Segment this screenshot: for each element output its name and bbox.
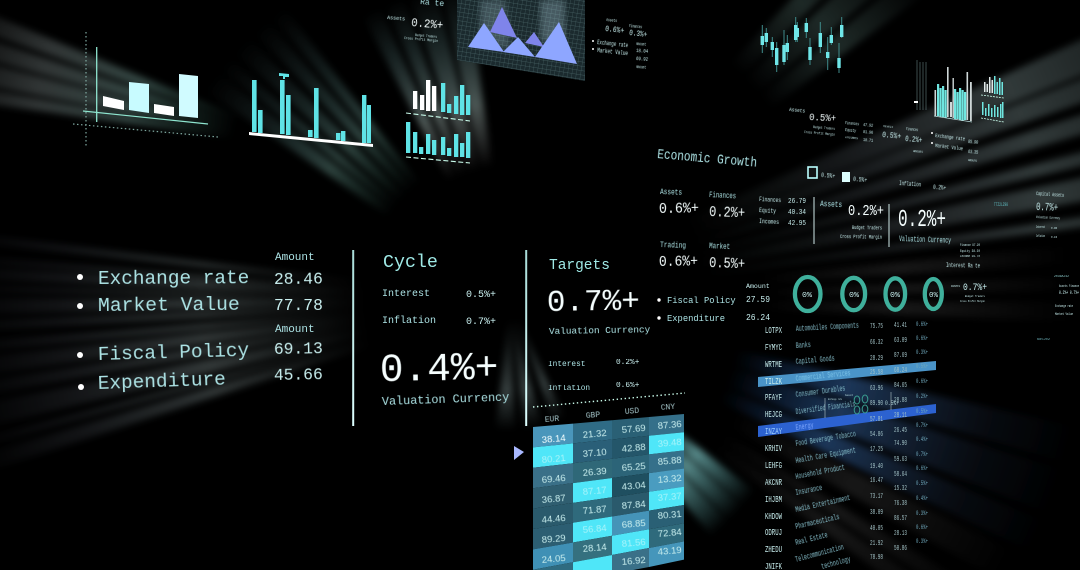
small stats: top centre left: 0.2%+: [411, 17, 444, 33]
currency table: 89.29: [541, 533, 566, 546]
currency table: CNY: [660, 403, 676, 413]
finances table: 26.79: [788, 198, 806, 206]
small stats: top centre right: 0.6%+: [605, 24, 625, 36]
currency table: [533, 403, 684, 570]
chart: candlesticks: [761, 17, 843, 73]
small stats: top centre right: 69.92: [636, 55, 648, 63]
sector names: Real Estate: [794, 530, 829, 548]
sector values: 0.6%+: [916, 465, 928, 472]
sector values: 63.09: [894, 337, 907, 345]
small stats: top centre right: Exchange rate: [597, 39, 629, 49]
small stats: top centre right: Market Value: [597, 47, 629, 57]
donut gauges: 0%: [849, 292, 860, 300]
small stats: top right: [789, 107, 978, 164]
small stats: inflation and side labels: Income 16.70: [960, 255, 980, 259]
sector names: Insurance: [795, 483, 823, 498]
currency table: USD: [624, 407, 640, 417]
small stats: inflation and side labels: 0.1%: [1051, 236, 1058, 240]
left panel: exchange and policy figures: Exchange rate: [98, 267, 249, 290]
left panel: exchange and policy figures: 77.78: [274, 296, 323, 315]
square legend: 0.5%+: [821, 172, 836, 180]
currency table: 68.85: [621, 518, 646, 531]
sector values: 19.40: [870, 463, 883, 471]
small stats: inflation and side labels: Finance 97.20: [960, 243, 980, 248]
tickers: WRTME: [765, 360, 782, 370]
sector values: 0.4%+: [916, 495, 928, 502]
small stats: top centre left: Cross Profit Margin: [404, 36, 439, 44]
sector values: 0.6%+: [916, 321, 928, 328]
marker arrow: [514, 446, 524, 460]
currency table: 43.19: [657, 545, 682, 558]
small stats: top right: Exchange rate: [935, 132, 965, 143]
stats grid: assets, finances, trading, market: Finances: [709, 191, 736, 201]
small stats: top right: Finances: [845, 121, 860, 127]
centre panel: targets: Interest: [548, 361, 585, 369]
sector values: 0.2%+: [916, 393, 928, 400]
stat: assets 0.2%: 0.2%+: [848, 203, 884, 220]
small stats: top right: Finances: [906, 127, 919, 133]
sector values: 0.7%+: [916, 422, 928, 429]
chart: dense bars top right: [914, 60, 1004, 122]
stat: valuation currency 0.2%: [898, 207, 951, 246]
currency table: 56.84: [582, 523, 608, 536]
overlapping mini dashboard: 0.5%+: [885, 400, 899, 407]
small stats: top right: 0.5%+: [882, 131, 902, 142]
chart: paired small bars: [406, 80, 470, 163]
small stat beside gauges: 0.7%+: [963, 283, 987, 294]
highlighted row: commercial services: [758, 361, 936, 387]
small stats: top centre left: Assets: [387, 14, 405, 23]
small stats: top right: Incomes: [845, 136, 858, 141]
centre panel: targets: Inflation: [548, 385, 590, 393]
centre panel: targets: [547, 258, 770, 393]
tickers: KRHIV: [765, 444, 782, 454]
small stats: top centre right: Finances: [629, 23, 643, 30]
sector values: 41.41: [894, 322, 907, 330]
centre panel: cycle: Inflation: [382, 315, 436, 327]
small stats: inflation and side labels: Valuation Currency: [1036, 215, 1061, 221]
sector values: [870, 321, 928, 562]
centre panel: cycle: [379, 253, 509, 409]
left panel: exchange and policy figures: Fiscal Policy: [98, 340, 249, 366]
small stats: inflation and side labels: [899, 180, 1079, 342]
centre panel: targets: 0.6%+: [616, 382, 640, 390]
sector values: 75.75: [870, 323, 883, 331]
sector values: 0.6%+: [916, 524, 928, 531]
finances table: 42.95: [788, 220, 806, 228]
small stats: inflation and side labels: Capital Assets: [1036, 191, 1064, 199]
sector values: 59.63: [894, 456, 907, 464]
sector names: Household Product: [795, 463, 846, 482]
centre panel: targets: Valuation Currency: [549, 324, 651, 337]
currency table: GBP: [585, 411, 601, 421]
centre panel: cycle: 0.7%+: [466, 317, 496, 328]
currency table: 81.56: [621, 537, 646, 550]
sector values: 38.09: [870, 509, 883, 517]
currency table: 21.32: [582, 428, 607, 441]
left panel: exchange and policy figures: Expenditure: [97, 369, 226, 395]
divider: [525, 250, 527, 426]
centre panel: cycle: Valuation Currency: [382, 391, 509, 409]
currency table: 80.21: [541, 453, 566, 466]
left panel: exchange and policy figures: Market Value: [98, 294, 240, 317]
sector names: Food Beverage Tobacco: [795, 429, 857, 449]
centre panel: targets: Targets: [549, 258, 610, 274]
sector table: [758, 321, 936, 570]
sector names: Energy: [795, 421, 814, 433]
sector values: 28.11: [894, 412, 907, 420]
currency table: 57.69: [621, 423, 646, 436]
sector values: 74.90: [894, 440, 907, 448]
currency table: 37.37: [657, 491, 682, 504]
square legend: [808, 167, 868, 184]
finances table: Equity: [759, 207, 776, 215]
small stats: inflation and side labels: Interest: [1036, 225, 1045, 230]
currency table: 71.87: [582, 504, 607, 517]
sector values: 17.25: [870, 446, 883, 454]
small stats: top right: Amount: [913, 150, 923, 155]
currency table: 87.84: [621, 499, 647, 512]
tickers: INZAY: [765, 427, 782, 437]
small stats: inflation and side labels: Interest Ra te: [946, 262, 980, 270]
currency table: 80.31: [657, 509, 682, 522]
currency table: 43.04: [621, 480, 647, 493]
small stats: top right: Amount: [968, 159, 977, 164]
tickers: LEHFG: [765, 461, 782, 471]
currency table: 87.36: [657, 419, 682, 432]
left panel: exchange and policy figures: 69.13: [274, 339, 323, 359]
centre panel: targets: Expenditure: [667, 314, 725, 324]
sector values: 84.65: [894, 382, 907, 390]
donut gauges: [795, 277, 942, 311]
sector names: Consumer Durables: [795, 384, 846, 400]
sector values: 89.90: [870, 400, 883, 408]
small stats: top right: 0.2%+: [905, 135, 923, 145]
currency table: 37.10: [582, 447, 607, 460]
currency table: 72.84: [657, 527, 683, 540]
small stats: top right: 47.92: [863, 122, 874, 129]
small stats: inflation and side labels: 2036AJ42: [1054, 275, 1069, 279]
sector values: 76.38: [894, 500, 907, 508]
sector values: 0.6%+: [916, 378, 928, 385]
sector values: 0.6%+: [916, 335, 928, 342]
tickers: PFAYF: [765, 393, 782, 403]
square legend: 0.5%+: [853, 176, 868, 184]
small stats: top right: 81.96: [863, 129, 874, 136]
currency table: 69.46: [541, 473, 566, 486]
sector values: 0.7%+: [916, 451, 928, 458]
sector values: 73.17: [870, 493, 883, 501]
sector names: Pharmaceuticals: [794, 512, 841, 532]
sector values: 50.86: [894, 545, 907, 553]
small stats: top right: Assets: [789, 107, 805, 115]
sector values: 28.13: [894, 530, 907, 538]
sector values: 68.24: [894, 367, 907, 375]
sector values: 0.5%+: [916, 363, 928, 370]
chart: triangles on grid panel: [457, 0, 585, 81]
sector names: Telecommunication: [794, 542, 845, 565]
sector names: Media Entertainment: [794, 493, 851, 515]
currency table: 36.87: [541, 493, 566, 506]
donut gauges: 0%: [890, 292, 901, 300]
small stats: top centre right: Assets: [606, 17, 618, 24]
sector values: 54.86: [870, 431, 883, 439]
overlapping mini dashboard: [825, 392, 899, 418]
centre panel: targets: 27.59: [746, 295, 770, 305]
currency table: 85.88: [657, 455, 682, 468]
small stats: top centre right: 0.3%+: [629, 28, 648, 40]
sector names: Diversified Financials: [795, 399, 856, 417]
sector values: 63.96: [870, 385, 883, 393]
sector values: 86.57: [894, 515, 907, 523]
tickers: [765, 326, 782, 570]
sector values: 0.5%+: [916, 480, 928, 487]
small stats: top right: 63.35: [968, 149, 978, 156]
left panel: exchange and policy figures: 28.46: [274, 270, 323, 289]
sector values: 87.69: [894, 352, 907, 360]
currency table: 16.92: [621, 555, 646, 568]
small stats: inflation and side labels: 0.8%: [1051, 227, 1058, 231]
centre panel: targets: 0.2%+: [616, 359, 640, 367]
left panel: exchange and policy figures: [77, 252, 323, 395]
dotted separator: [533, 393, 685, 407]
stats grid: assets, finances, trading, market: 0.2%+: [709, 204, 745, 222]
left panel: exchange and policy figures: Amount: [275, 324, 315, 336]
currency table: 42.88: [621, 442, 646, 455]
stats grid: assets, finances, trading, market: 0.5%+: [709, 255, 745, 273]
currency table: EUR: [544, 415, 560, 425]
centre panel: cycle: 0.5%+: [466, 290, 496, 301]
centre panel: targets: 26.24: [746, 313, 770, 323]
centre panel: cycle: Interest: [382, 289, 430, 300]
small stats: inflation and side labels: 0.2%+: [933, 184, 947, 192]
sector values: 0.3%+: [916, 510, 928, 517]
small stats: inflation and side labels: Inflation: [1036, 234, 1045, 239]
sector values: 26.45: [894, 427, 907, 435]
centre panel: cycle: 0.4%+: [379, 346, 499, 393]
stats grid: assets, finances, trading, market: Market: [709, 242, 730, 252]
stats grid: assets, finances, trading, market: [659, 188, 745, 273]
tickers: TILZK: [765, 377, 782, 387]
sector values: 66.32: [870, 339, 883, 347]
stat: valuation currency 0.2%: 0.2%+: [898, 207, 946, 234]
small stats: top right: 85.90: [968, 139, 978, 146]
tickers: LOTPX: [765, 326, 782, 336]
stat: assets 0.2%: Cross Profit Margin: [840, 233, 882, 241]
small stats: inflation and side labels: 0.7%+: [1036, 202, 1058, 215]
centre panel: targets: 0.7%+: [547, 284, 640, 321]
sector values: 57.81: [870, 416, 883, 424]
finances table: Incomes: [759, 218, 779, 226]
centre panel: cycle: Cycle: [383, 253, 438, 273]
tickers: ZHEDU: [765, 545, 782, 555]
small stats: inflation and side labels: Market Value: [1055, 312, 1073, 317]
tickers: KHDOW: [765, 512, 782, 522]
small stats: top right: Market Value: [935, 142, 963, 152]
sector values: 28.29: [870, 355, 883, 363]
stat: valuation currency 0.2%: Valuation Currency: [899, 235, 951, 246]
small stats: top right: Assets: [883, 125, 893, 130]
stat: assets 0.2%: Assets: [820, 200, 842, 210]
sector names: Automobiles Components: [796, 321, 859, 334]
sector values: 0.3%+: [916, 349, 928, 356]
tickers: AKCNR: [765, 478, 782, 488]
donut gauges: 0%: [802, 292, 813, 300]
sector values: 25.58: [870, 369, 883, 377]
small stats: inflation and side labels: Inflation: [899, 180, 922, 189]
tickers: FYMYC: [765, 343, 782, 353]
small stats: inflation and side labels: TTZ2LZ98: [994, 202, 1008, 208]
chart: cyan bars on white baseline: [249, 73, 373, 147]
stats grid: assets, finances, trading, market: Trading: [660, 241, 686, 251]
currency table: 44.46: [541, 513, 566, 526]
currency table: 28.14: [582, 542, 608, 555]
stats grid: assets, finances, trading, market: 0.6%+: [659, 253, 698, 271]
small stat beside gauges: [951, 283, 987, 303]
centre panel: targets: Fiscal Policy: [667, 296, 736, 306]
sector names: [794, 321, 859, 570]
finances table: [759, 196, 814, 244]
small stats: top centre left: Budget Traders: [415, 33, 438, 40]
centre panel: targets: Amount: [746, 283, 770, 290]
overlapping mini dashboard: Amount: [845, 394, 853, 397]
small stats: inflation and side labels: Equity 38.20: [960, 249, 980, 254]
sector values: 16.47: [870, 477, 883, 485]
small stats: top right: Equity: [845, 128, 857, 134]
sector values: 21.92: [870, 540, 883, 548]
sector values: 0.4%+: [916, 436, 928, 443]
stats grid: assets, finances, trading, market: 0.6%+: [659, 200, 699, 218]
sector values: 78.98: [870, 554, 883, 562]
sector names: Capital Goods: [795, 354, 835, 367]
small stats: top right: Cross Profit Margin: [804, 130, 836, 138]
small stats: inflation and side labels: 685J02: [1037, 338, 1051, 342]
currency table: 24.05: [541, 553, 566, 566]
finances table: 40.34: [788, 209, 806, 217]
sector values: 40.05: [870, 525, 883, 533]
sector values: 15.32: [894, 485, 907, 493]
left panel: exchange and policy figures: Amount: [275, 252, 315, 264]
currency table: 38.14: [541, 433, 567, 446]
finances table: Finances: [759, 196, 781, 204]
highlighted row: energy: [758, 404, 936, 437]
stats grid: assets, finances, trading, market: Assets: [660, 188, 682, 198]
small stats: top centre right: 18.04: [636, 47, 649, 55]
sector values: 0.3%+: [916, 538, 928, 545]
stat: assets 0.2%: [820, 200, 889, 247]
chart: white and cyan bars with axes: [73, 32, 218, 148]
sector names: Commercial Services: [795, 368, 851, 384]
currency table: 87.17: [582, 485, 607, 498]
sector values: 28.88: [894, 397, 907, 405]
small stat beside gauges: Budget Traders: [965, 294, 985, 298]
sector names: Banks: [796, 340, 811, 351]
heading: Economic Growth: Economic Growth: [657, 148, 757, 172]
tickers: IHJBM: [765, 495, 782, 505]
small stats: top right: 18.71: [863, 137, 874, 144]
stat: assets 0.2%: Budget Traders: [852, 224, 882, 232]
donut gauges: 0%: [929, 292, 938, 300]
divider: [352, 250, 354, 426]
small stats: top centre left: [387, 0, 445, 44]
tickers: HEJCG: [765, 410, 782, 420]
overlapping mini dashboard: Exchange rate: [828, 397, 842, 401]
small stat beside gauges: Cross Profit Margin: [960, 299, 985, 303]
small stat beside gauges: Assets: [951, 285, 960, 289]
small stats: top centre right: Amount: [636, 64, 646, 71]
small stats: top centre right: [592, 17, 649, 71]
left panel: exchange and policy figures: 45.66: [274, 365, 323, 385]
currency table: 13.32: [657, 473, 682, 486]
sector names: Health Care Equipment: [795, 446, 857, 466]
currency table: 26.39: [582, 466, 607, 479]
currency table: 65.25: [621, 461, 646, 474]
sector values: 0.5%+: [916, 408, 928, 415]
small stats: top centre right: Amount: [636, 41, 646, 48]
tickers: ODRUJ: [765, 528, 782, 538]
small stats: top right: Budget Traders: [813, 125, 836, 132]
sector values: 58.64: [894, 471, 907, 479]
currency table: 39.48: [657, 437, 682, 450]
small stats: top right: 0.5%+: [809, 112, 836, 125]
